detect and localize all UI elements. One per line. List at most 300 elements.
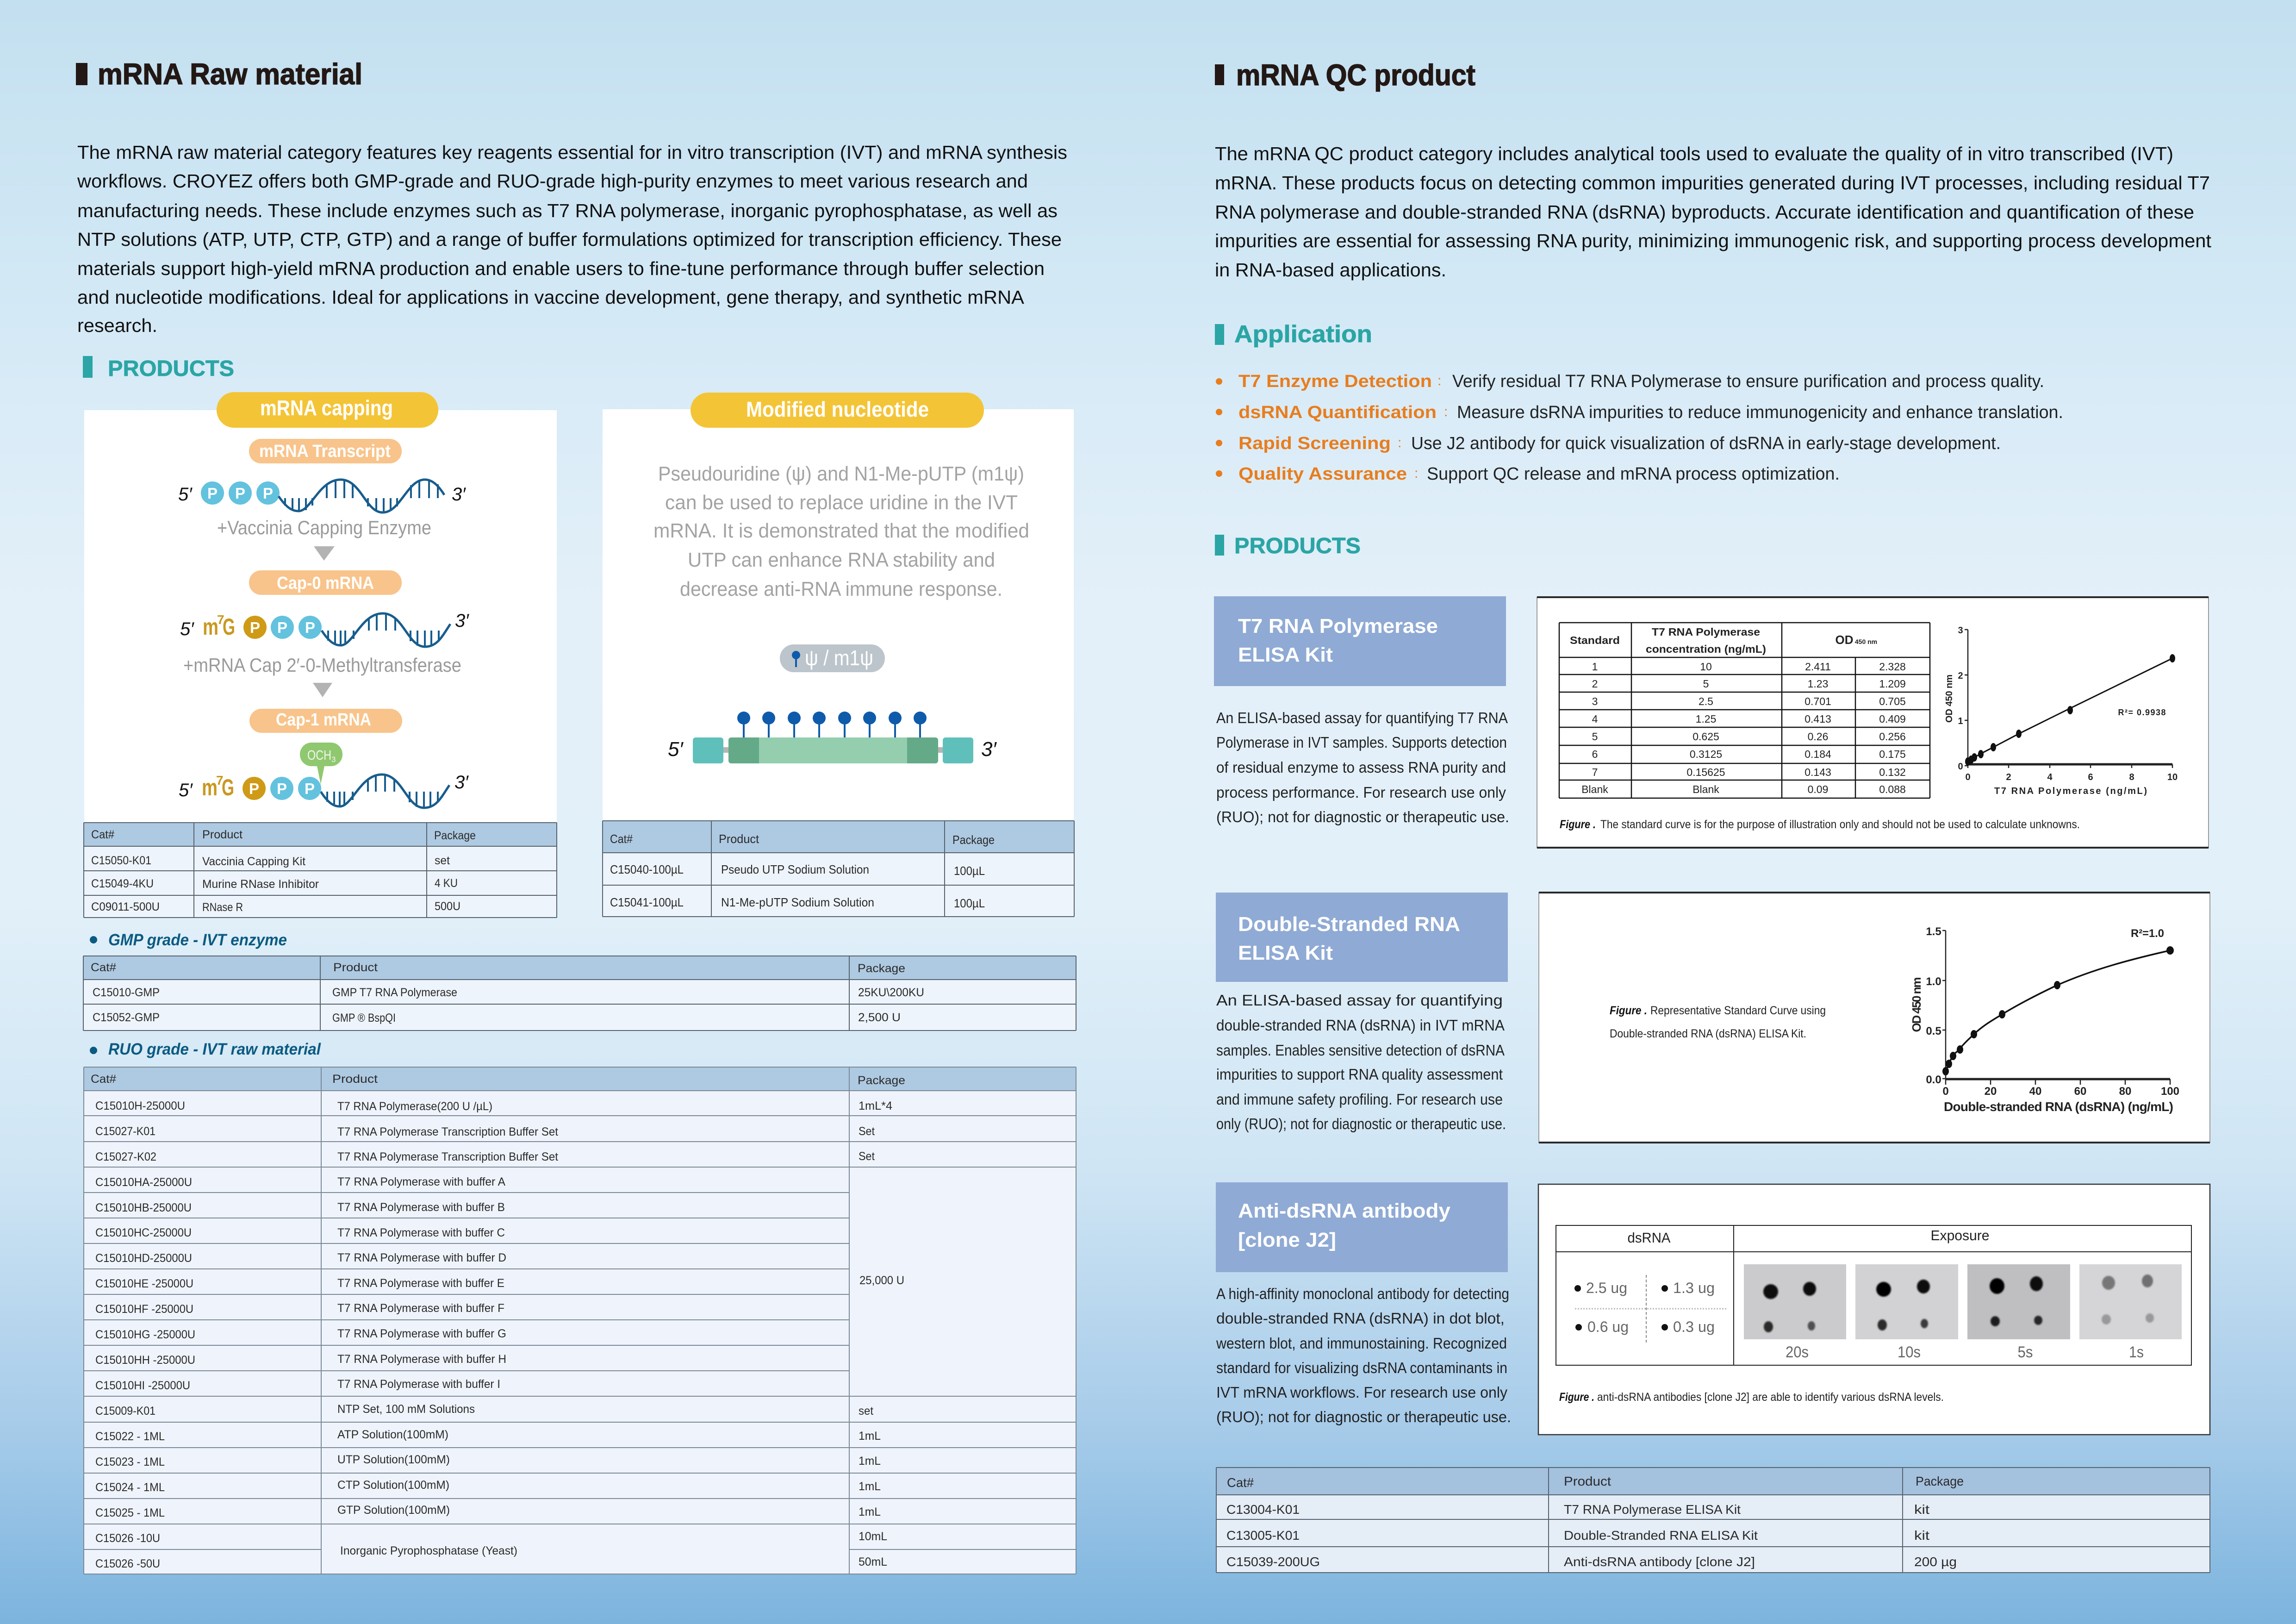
table: GMP grade products: Package [858,962,905,975]
diagram: Cap-1 transcript with OCH3 [179,743,469,808]
description: (RUO); not for diagnostic or therapeutic use. [1216,1408,1511,1425]
arrow: to Cap-1 [313,683,332,697]
table rows: product names: NTP Set, 100 mM Solutions [337,1403,475,1416]
dsRNA amount key: 1.3 ug [1673,1280,1715,1296]
chart: T7 standard curve: 10 [2167,772,2178,782]
diagram: Cap-0 transcript: P [250,619,260,636]
table: modified nucleotide products: 100µL [954,864,985,878]
text: modified nucleotide description: Pseudouridine (ψ) and N1-Me-pUTP (m1ψ) [658,462,1024,485]
chart: dsRNA standard curve: 1.5 [1926,925,1941,938]
dsRNA amount key: 0.3 ug [1673,1318,1715,1335]
diagram: Cap-0 transcript: G [223,614,235,640]
diagram: Cap-1 transcript with OCH3: OCH [307,748,331,763]
standards table: 4 [1592,713,1598,725]
diagram: Cap-1 transcript with OCH3: m [202,775,218,800]
list item: Quality Assurance: Support QC release and mRNA process optimization. [1427,464,1840,484]
standards table: Standard [1570,634,1620,646]
text: modified nucleotide description: can be used to replace uridine in the IVT [665,491,1018,514]
dsRNA amount key: 2.5 ug [1586,1280,1627,1296]
table rows: catalogue numbers: C15026 -10U [95,1532,160,1545]
intro text block: and nucleotide modifications. Ideal for applications in vaccine development, gene therapy, and synthetic mRNA [77,287,1025,308]
description: (RUO); not for diagnostic or therapeutic use. [1216,808,1509,825]
diagram: Cap-0 transcript: P [277,619,287,636]
standards table: T7 RNA Polymerase [1652,626,1760,638]
diagram: uncapped transcript [178,480,466,512]
description: and immune safety profiling. For research use [1216,1091,1503,1108]
description: process performance. For research use only [1216,784,1506,801]
table rows: product names: T7 RNA Polymerase with buffer A [337,1175,505,1188]
standards table: 7 [1592,766,1598,778]
table: modified nucleotide products [603,821,1074,917]
figure card [1537,597,2209,848]
chart: T7 standard curve: 1 [1958,716,1963,726]
table rows: product names: Inorganic Pyrophosphatase (Yeast) [340,1544,517,1557]
table: GMP grade products [83,956,1076,1031]
list item: Rapid Screening: Rapid Screening [1238,434,1391,453]
chart: dsRNA standard curve: OD 450 nm [1910,977,1923,1032]
intro text block: The mRNA raw material category features key reagents essential for in vitro transcription (IVT) and mRNA synthesis [77,142,1067,163]
diagram: Cap-1 transcript with OCH3: 5′ [179,780,193,800]
panel: T7 RNA Polymerase ELISA Kit [1214,596,2209,848]
list item: T7 Enzyme Detection: Verify residual T7 RNA Polymerase to ensure purification and process quality. [1452,372,2044,391]
chart: dsRNA standard curve: 1.0 [1926,975,1941,988]
table rows: product names: GTP Solution(100mM) [337,1504,450,1517]
title box: Anti-dsRNA antibody [1238,1199,1451,1222]
standards table: 1.209 [1879,678,1906,690]
standards table: 0.132 [1879,766,1906,778]
table rows: product names: T7 RNA Polymerase with buffer C [337,1226,505,1239]
title box [1216,1182,1508,1272]
table rows: catalogue numbers: C15010HH -25000U [95,1354,195,1367]
table rows: product names: UTP Solution(100mM) [337,1453,450,1466]
table rows: packages: 10mL [859,1530,887,1543]
table rows: catalogue numbers: C15009-K01 [95,1405,156,1418]
description: samples. Enables sensitive detection of dsRNA [1216,1042,1505,1059]
dot blot figure: dsRNA [1627,1230,1671,1246]
standards table: 5 [1703,678,1709,690]
table: QC products: C15039-200UG [1226,1555,1320,1569]
table: modified nucleotide products: C15040-100µL [610,862,684,876]
standards table: 6 [1592,748,1598,760]
table rows: catalogue numbers: C15010HG -25000U [95,1328,195,1341]
title box: [clone J2] [1238,1229,1336,1251]
description: only (RUO); not for diagnostic or therapeutic use. [1216,1115,1506,1132]
table: RUO grade products: Product [332,1073,378,1086]
table: RUO grade products: Cat# [91,1073,116,1086]
chart: T7 standard curve: 8 [2129,772,2134,782]
dot blot figure [1556,1225,2191,1365]
list: applications [1216,372,2063,484]
chart: T7 standard curve: T7 RNA Polymerase (ng/mL) [1994,786,2147,796]
table: QC products: Product [1564,1474,1611,1488]
table rows: packages: 50mL [859,1555,887,1568]
chart: dsRNA standard curve: 100 [2161,1085,2179,1098]
intro text block [77,142,1067,336]
intro text block: impurities are essential for assessing RNA purity, minimizing immunogenic risk, and supporting process development [1215,230,2212,251]
dsRNA amount key: 0.6 ug [1587,1318,1629,1335]
intro text block: workflows. CROYEZ offers both GMP-grade and RUO-grade high-purity enzymes to meet various research and [77,170,1028,192]
right column: mRNA QC product [1214,58,2212,1573]
chart: dsRNA standard curve: 20 [1985,1085,1997,1098]
table rows: catalogue numbers: C15010HI -25000U [95,1379,190,1392]
legend: pseudouridine pin: ψ / m1ψ [805,646,873,670]
table rows: product names: T7 RNA Polymerase with buffer H [337,1353,506,1366]
list item: Rapid Screening: : [1398,435,1401,450]
dot blot figure: 10s [1898,1343,1921,1361]
standards table: 0.625 [1692,731,1719,743]
text: +mRNA Cap 2'-0-Methyltransferase: +mRNA Cap 2′-0-Methyltransferase [183,654,461,676]
chart: dsRNA standard curve: 40 [2029,1085,2041,1098]
heading: RUO grade - IVT raw material: RUO grade - IVT raw material [108,1040,321,1058]
figure caption: Representative Standard Curve using [1650,1004,1826,1017]
standards table: 0.088 [1879,783,1906,795]
chart: dsRNA standard curve: 60 [2074,1085,2086,1098]
standards table: 0.3125 [1690,748,1722,760]
table: capping products: C15049-4KU [91,877,154,890]
label: Cap-0 mRNA [249,570,402,595]
standards table: 0.175 [1879,748,1906,760]
title box [1214,596,1506,686]
table: GMP grade products: C15052-GMP [93,1011,160,1024]
standards table: concentration (ng/mL) [1646,643,1766,655]
standards table [1559,623,1930,798]
intro text block: mRNA. These products focus on detecting common impurities generated during IVT processes, including residual T7 [1215,172,2210,194]
table: capping products: Vaccinia Capping Kit [202,855,305,868]
standards table: 3 [1592,695,1598,707]
table rows: packages [859,1099,904,1568]
figure card [1539,893,2210,1143]
list item: Rapid Screening: Use J2 antibody for quick visualization of dsRNA in early-stage development. [1411,434,2001,453]
diagram: Cap-1 transcript with OCH3: 3′ [454,772,469,793]
list item: dsRNA Quantification: Measure dsRNA impurities to reduce immunogenicity and enhance translation. [1457,403,2063,422]
table rows: catalogue numbers: C15026 -50U [95,1557,160,1570]
intro text block: manufacturing needs. These include enzymes such as T7 RNA polymerase, inorganic pyrophosphatase, as well as [77,200,1058,221]
table rows: catalogue numbers [95,1099,195,1570]
table: modified nucleotide products: N1-Me-pUTP Sodium Solution [721,895,874,909]
table: capping products: C15050-K01 [91,854,151,867]
table: GMP grade products: Product [333,961,378,974]
table: QC products: kit [1914,1502,1929,1517]
standards table: Blank [1581,783,1608,795]
table: capping products: C09011-500U [91,900,160,913]
diagram: Cap-0 transcript: P [305,619,315,636]
diagram: uncapped transcript: P [263,485,273,502]
table rows: catalogue numbers: C15022 - 1ML [95,1430,165,1443]
figure card [1538,1184,2210,1435]
chart: T7 standard curve: 4 [2047,772,2053,782]
diagram: Cap-0 transcript: 3′ [455,611,469,631]
diagram: Cap-1 transcript with OCH3: 3 [331,755,336,764]
intro text block: materials support high-yield mRNA production and enable users to fine-tune performance through buffer selection [77,258,1045,279]
diagram: Cap-0 transcript [180,611,469,647]
text: modified nucleotide description: decrease anti-RNA immune response. [680,578,1002,600]
table: GMP grade products: C15010-GMP [93,986,160,999]
heading: PRODUCTS: PRODUCTS [108,356,234,381]
diagram: uncapped transcript: P [207,485,218,502]
chart: dsRNA standard curve: 0.5 [1926,1025,1941,1037]
standards table: 1.25 [1696,713,1716,725]
table rows: catalogue numbers: C15010HA-25000U [95,1176,192,1189]
table: RUO grade products [84,1067,1076,1574]
table rows: catalogue numbers: C15010HB-25000U [95,1201,192,1214]
standards table: 0.143 [1804,766,1831,778]
table: QC products: Package [1916,1474,1964,1488]
table rows: packages: 1mL [859,1505,881,1518]
diagram: Cap-1 transcript with OCH3: P [249,780,259,797]
arrow: to Cap-0 [314,546,335,561]
heading: PRODUCTS: PRODUCTS [1234,534,1361,558]
table: QC products: C13004-K01 [1226,1502,1300,1517]
chart: T7 standard curve: 3 [1958,625,1963,636]
text: modified nucleotide description: mRNA. It is demonstrated that the modified [653,519,1029,542]
table rows: packages: 25,000 U [859,1274,904,1287]
table rows: packages: 1mL [859,1430,881,1443]
description: impurities to support RNA quality assessment [1216,1066,1503,1083]
diagram: modified mRNA construct: 3′ [981,738,997,761]
dot blot figure: Exposure [1931,1227,1989,1243]
diagram: Cap-1 transcript with OCH3: P [277,780,287,797]
standards table: Blank [1692,783,1719,795]
label: Cap-0 mRNA: Cap-0 mRNA [277,574,374,593]
table: QC products: kit [1914,1528,1929,1543]
legend: pseudouridine pin [780,644,885,672]
table: modified nucleotide products: 100µL [954,896,985,910]
list item: T7 Enzyme Detection: : [1437,373,1441,388]
blot: 10s [1855,1264,1958,1339]
standards table: 0.409 [1879,713,1906,725]
table: modified nucleotide products: Package [952,833,995,847]
intro text block: in RNA-based applications. [1215,259,1446,281]
figure caption: anti-dsRNA antibodies [clone J2] are able to identify various dsRNA levels. [1597,1391,1944,1404]
table rows: packages: Set [859,1125,875,1138]
chart: T7 standard curve: 6 [2088,772,2093,782]
table rows: product names: T7 RNA Polymerase with buffer F [337,1302,504,1315]
table rows: product names: ATP Solution(100mM) [337,1428,448,1441]
table rows: product names: T7 RNA Polymerase with buffer B [337,1201,505,1214]
pill: Modified nucleotide [691,393,984,428]
table rows: product names: T7 RNA Polymerase with buffer G [337,1327,506,1340]
table: modified nucleotide products: Product [719,832,759,846]
intro text block: NTP solutions (ATP, UTP, CTP, GTP) and a range of buffer formulations optimized for transcription efficiency. These [77,229,1062,250]
chart: T7 standard curve: 0 [1958,762,1963,772]
text: modified nucleotide description [653,462,1029,600]
chart: dsRNA standard curve: R²=1.0 [2131,927,2164,940]
standards table: 5 [1592,731,1598,743]
heading: mRNA Raw material: mRNA Raw material [98,57,362,91]
table: GMP grade products: GMP T7 RNA Polymerase [332,986,457,999]
standards table: 0.256 [1879,731,1906,743]
description [1216,992,1506,1132]
table: QC products: T7 RNA Polymerase ELISA Kit [1564,1502,1741,1517]
table: capping products: Product [202,828,243,841]
table: QC products: C13005-K01 [1226,1528,1300,1543]
table rows: product names: T7 RNA Polymerase with buffer I [337,1378,500,1391]
table: capping products: RNase R [202,901,243,914]
title box [1216,893,1508,982]
dot blot figure: 20s [1786,1343,1809,1361]
description: IVT mRNA workflows. For research use only [1216,1384,1507,1401]
table: capping products: Package [434,829,476,842]
standards table: 2 [1592,678,1598,690]
table rows: product names: T7 RNA Polymerase Transcription Buffer Set [337,1150,558,1163]
dsRNA amount key [1574,1275,1726,1343]
table rows: catalogue numbers: C15010HE -25000U [95,1277,193,1290]
standards table: 2.411 [1805,661,1831,673]
diagram: Cap-0 transcript: 5′ [180,619,194,639]
chart: T7 standard curve: OD 450 nm [1944,675,1954,723]
table: GMP grade products: GMP ® BspQI [332,1012,396,1024]
table rows: product names: T7 RNA Polymerase with buffer E [337,1277,504,1290]
table rows: packages: 1mL [859,1455,881,1468]
table: QC products: Anti-dsRNA antibody [clone J2] [1564,1555,1755,1569]
text: modified nucleotide description: UTP can enhance RNA stability and [688,549,995,571]
table rows: catalogue numbers: C15024 - 1ML [95,1481,165,1494]
table: GMP grade products: 25KU\200KU [858,986,924,999]
description: An ELISA-based assay for quantifying [1216,992,1503,1009]
figure caption: Figure . [1610,1004,1647,1017]
table rows: packages: Set [859,1150,875,1163]
standards table: 1.23 [1808,678,1828,690]
text: +Vaccinia Capping Enzyme: +Vaccinia Capping Enzyme [217,517,431,538]
description: An ELISA-based assay for quantifying T7 RNA [1216,709,1508,726]
table rows: catalogue numbers: C15010HC-25000U [95,1226,192,1239]
chart: dsRNA standard curve: 0 [1942,1085,1949,1098]
table rows: product names: T7 RNA Polymerase Transcription Buffer Set [337,1125,558,1138]
heading: Application: Application [1234,321,1372,348]
pill: Modified nucleotide: Modified nucleotide [746,397,929,421]
table rows: product names [337,1100,558,1557]
standards table: OD [1836,633,1853,647]
title box: ELISA Kit [1238,942,1333,964]
chart: T7 standard curve: 0 [1965,772,1971,782]
list item: dsRNA Quantification: : [1444,404,1448,419]
table rows: packages: set [859,1405,873,1418]
diagram: uncapped transcript: 3′ [452,484,466,505]
diagram: modified mRNA construct [668,712,997,763]
table: capping products [84,823,557,918]
figure caption [1610,1004,1826,1040]
description [1216,1285,1511,1425]
diagram: Cap-1 transcript with OCH3: 7 [216,773,224,787]
description: standard for visualizing dsRNA contaminants in [1216,1359,1507,1376]
blot: 20s [1744,1264,1846,1339]
panel: Anti-dsRNA antibody [clone J2] [1216,1182,2210,1435]
heading: GMP grade - IVT enzyme: GMP grade - IVT enzyme [108,931,287,949]
dot blot figure: 1s [2129,1343,2144,1361]
table: RUO grade products: Package [858,1074,905,1087]
table rows: catalogue numbers: C15027-K02 [95,1150,156,1163]
list item: Quality Assurance: : [1414,466,1418,481]
intro text block: The mRNA QC product category includes analytical tools used to evaluate the quality of in vitro transcribed (IVT) [1215,143,2173,164]
table rows: product names: T7 RNA Polymerase(200 U /µL) [337,1100,492,1113]
table rows: catalogue numbers: C15010HD-25000U [95,1252,192,1265]
diagram: Cap-1 transcript with OCH3: P [305,780,315,797]
standards table: 450 nm [1855,638,1877,645]
description: Polymerase in IVT samples. Supports detection [1216,734,1507,751]
table rows: packages: 1mL [859,1480,881,1493]
table: QC products [1216,1468,2210,1573]
table rows: product names: CTP Solution(100mM) [337,1479,449,1492]
figure caption: Figure . [1559,1391,1594,1404]
chart: T7 standard curve [1944,625,2178,796]
diagram: Cap-0 transcript: 7 [217,612,224,627]
intro text block: RNA polymerase and double-stranded RNA (dsRNA) byproducts. Accurate identification and quantification of these [1215,201,2194,223]
table: QC products: Double-Stranded RNA ELISA Kit [1564,1528,1758,1543]
table: modified nucleotide products: Cat# [610,832,633,846]
description: double-stranded RNA (dsRNA) in IVT mRNA [1216,1017,1505,1034]
chart: dsRNA standard curve: 80 [2119,1085,2131,1098]
label: mRNA Transcript: mRNA Transcript [259,442,391,461]
diagram: uncapped transcript: 5′ [178,484,193,505]
standards table: 0.184 [1804,748,1831,760]
description [1216,709,1509,825]
standards table: 0.15625 [1686,766,1725,778]
blot: 5s [1967,1264,2070,1339]
table rows: product names: T7 RNA Polymerase with buffer D [337,1251,506,1264]
intro text block: research. [77,315,157,336]
list item: Quality Assurance [1216,464,1840,484]
diagram: uncapped transcript: P [235,485,245,502]
diagram: Cap-1 transcript with OCH3: G [222,775,234,800]
list item: T7 Enzyme Detection: T7 Enzyme Detection [1238,372,1432,391]
heading: mRNA QC product: mRNA QC product [1236,58,1475,92]
chart: dsRNA standard curve: Double-stranded RNA (dsRNA) (ng/mL) [1944,1099,2173,1114]
figure caption: The standard curve is for the purpose of illustration only and should not be used to calculate unknowns. [1600,818,2080,831]
panel: Double-Stranded RNA ELISA Kit [1216,893,2210,1143]
standards table: 0.413 [1804,713,1831,725]
table rows: catalogue numbers: C15023 - 1ML [95,1455,165,1468]
list item: dsRNA Quantification: dsRNA Quantification [1238,403,1437,422]
title box: Double-Stranded RNA [1238,913,1460,936]
chart: T7 standard curve: 2 [1958,671,1963,681]
label: Cap-1 mRNA: Cap-1 mRNA [276,710,371,730]
table rows: catalogue numbers: C15027-K01 [95,1125,156,1138]
standards table: 0.26 [1808,731,1828,743]
table: modified nucleotide products: C15041-100µL [610,895,684,909]
table: capping products: Cat# [91,828,114,841]
blot: 1s [2079,1264,2182,1339]
chart: T7 standard curve: R²= 0.9938 [2118,708,2166,717]
panel: Modified nucleotide [603,393,1074,821]
table rows: packages: 1mL*4 [859,1099,892,1112]
table rows: catalogue numbers: C15025 - 1ML [95,1506,165,1519]
figure caption: Figure . [1560,818,1596,831]
intro text block [1215,143,2212,281]
standards table: 2.5 [1699,695,1713,707]
standards table: 0.09 [1808,783,1828,795]
standards table: 1 [1592,661,1598,673]
description: double-stranded RNA (dsRNA) in dot blot, [1216,1310,1505,1327]
table: modified nucleotide products: Pseudo UTP Sodium Solution [721,862,869,876]
pill: mRNA capping: mRNA capping [260,396,393,420]
table: capping products: 500U [435,900,460,913]
table: GMP grade products: 2,500 U [858,1011,901,1024]
dot blot figure: 5s [2018,1343,2033,1361]
description: of residual enzyme to assess RNA purity and [1216,759,1506,776]
chart: dsRNA standard curve [1910,925,2179,1114]
panel: mRNA capping [84,392,557,823]
left column: mRNA Raw material [76,57,1076,1574]
list item: Quality Assurance: Quality Assurance [1238,464,1407,484]
standards table: 0.705 [1879,695,1906,707]
title box: ELISA Kit [1238,643,1333,666]
table: capping products: set [435,854,450,867]
chart: dsRNA standard curve: 0.0 [1926,1074,1941,1086]
table: QC products: Cat# [1227,1475,1254,1490]
pill: mRNA capping [217,392,438,428]
standards table: 0.701 [1804,695,1831,707]
description: western blot, and immunostaining. Recognized [1216,1335,1507,1352]
